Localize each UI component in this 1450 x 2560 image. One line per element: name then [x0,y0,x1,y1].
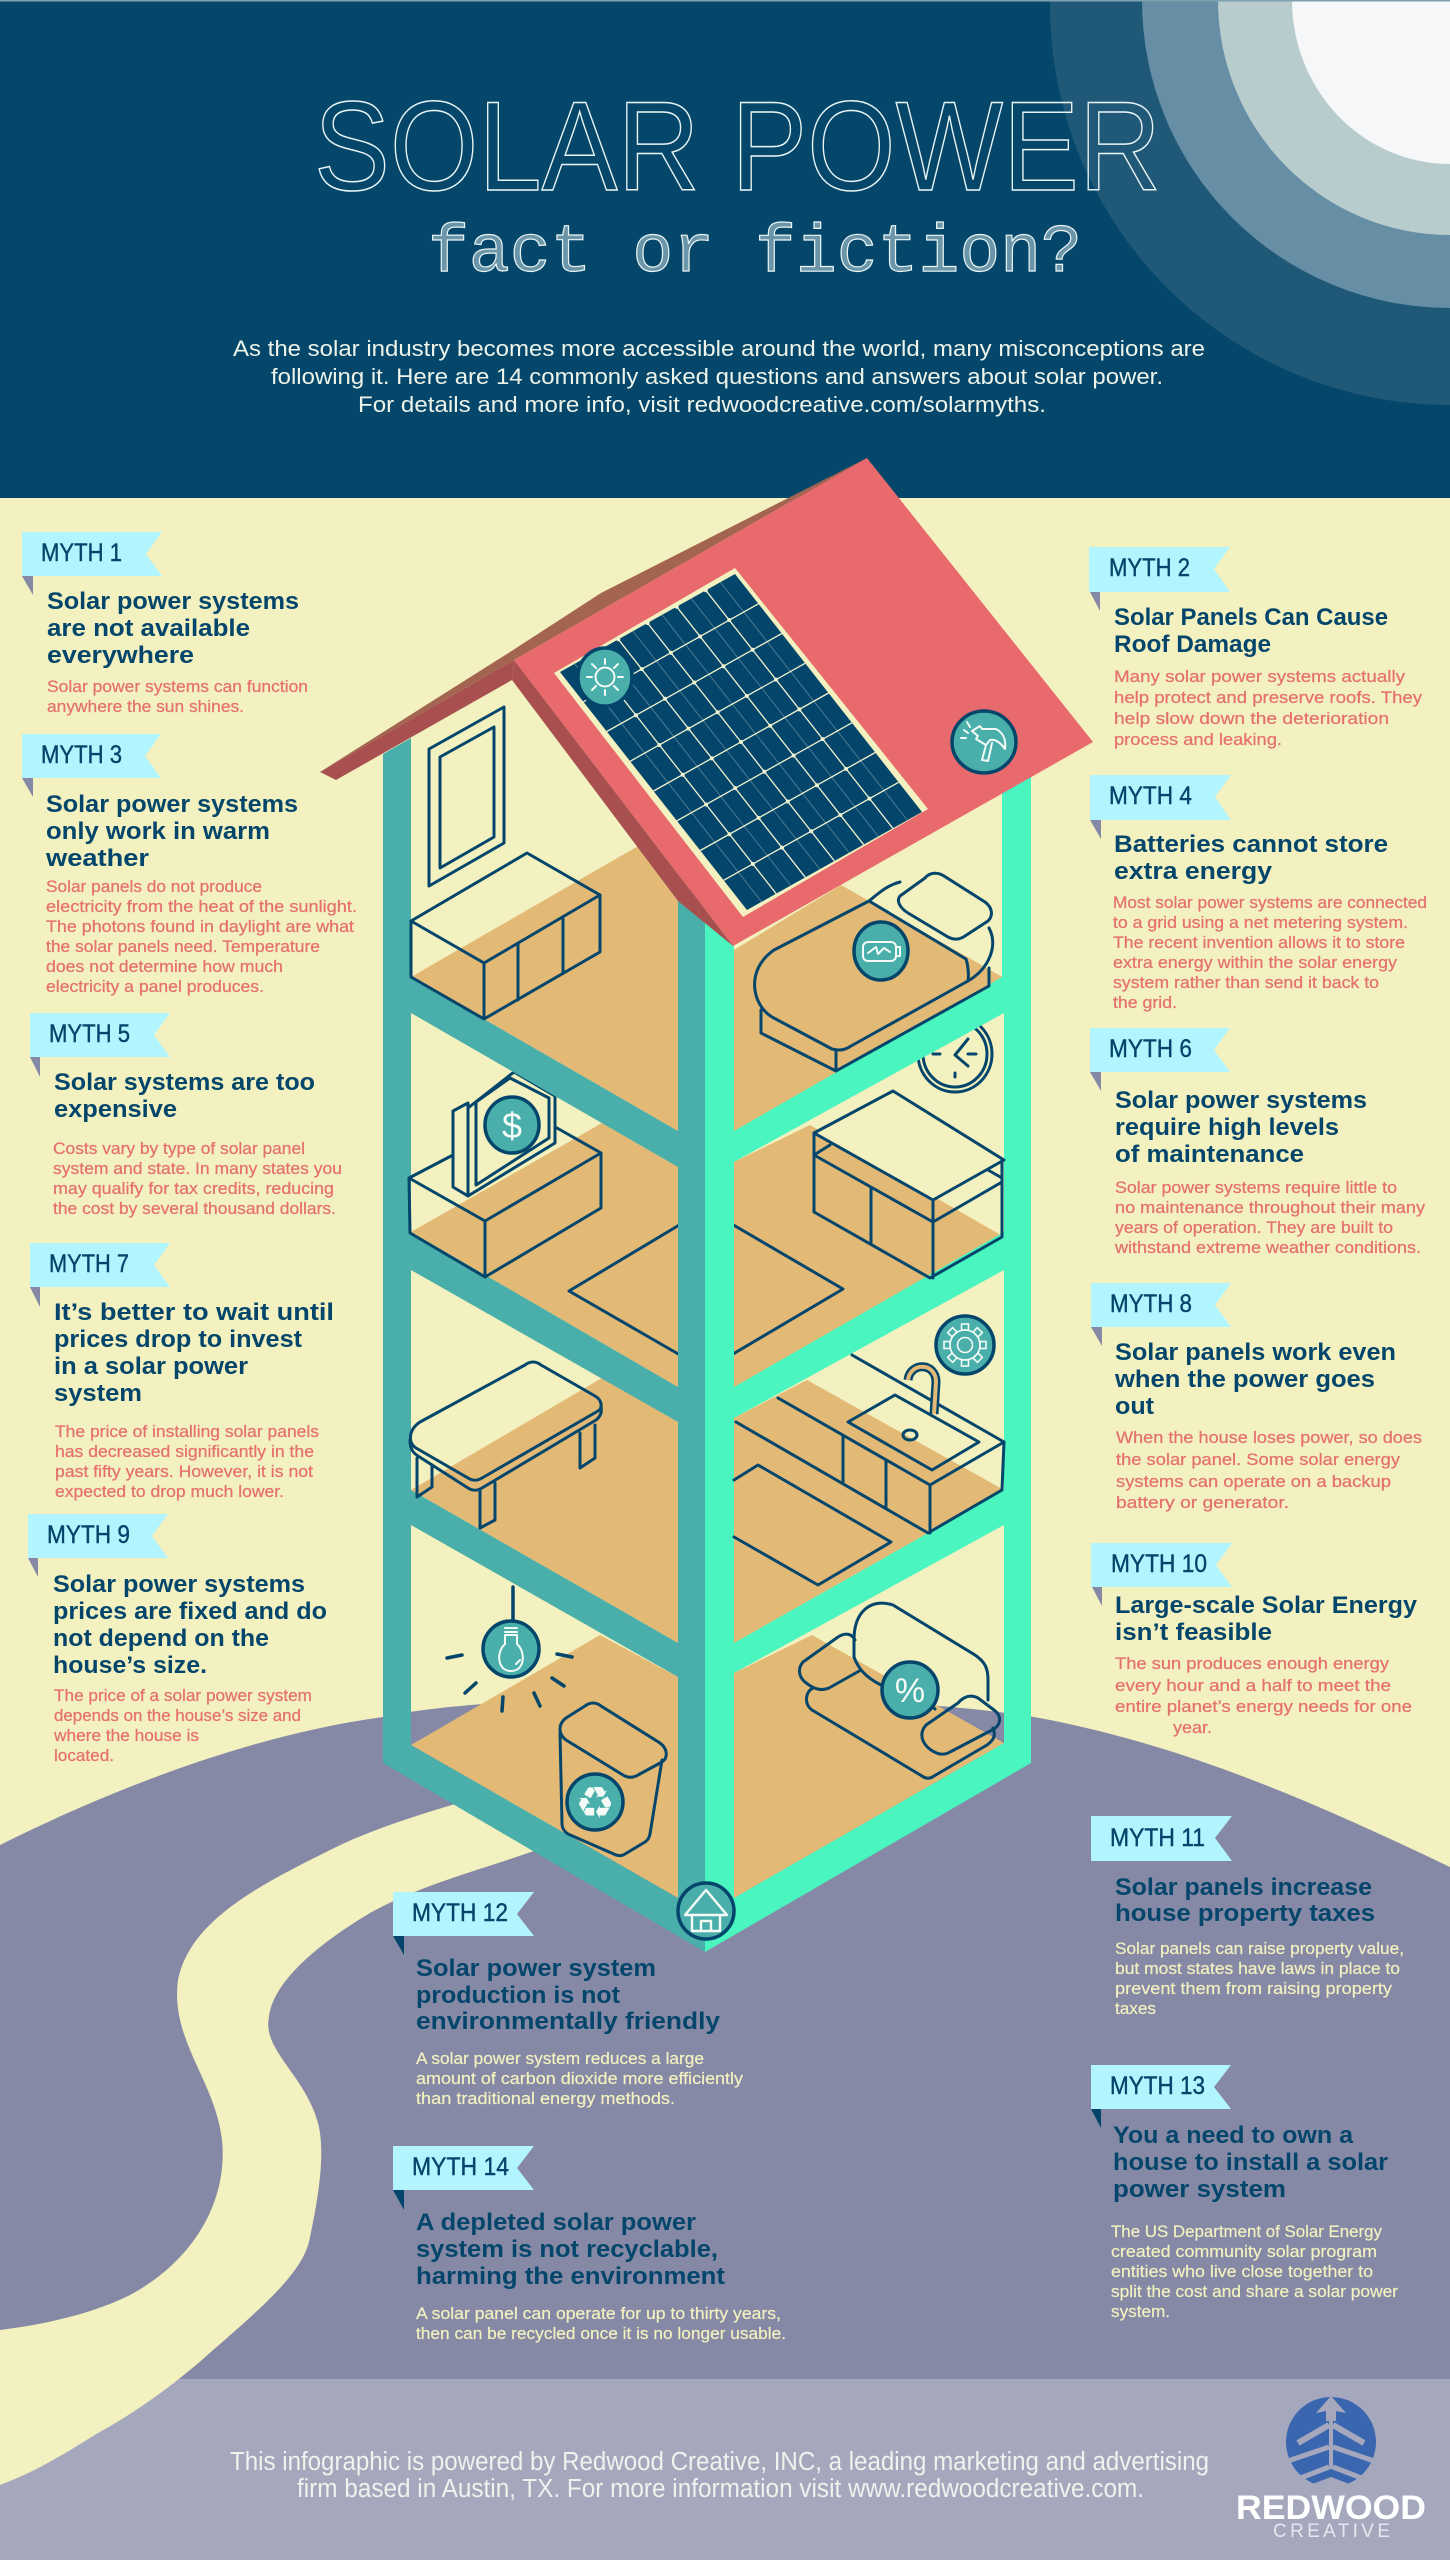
left frame wall [383,738,705,1952]
text: myth 9 [53,1686,312,1765]
text: myth 5: the cost by several thousand dollars. [53,1199,336,1218]
text: myth 7: expected to drop much lower. [55,1482,284,1501]
text: myth 7: past fifty years. However, it is not [55,1462,313,1481]
text: myth 10: year. [1173,1718,1212,1737]
text: myth 3: The photons found in daylight are what [46,917,354,936]
bulb cord and rays [447,1587,572,1711]
text: myth 8: the solar panel. Some solar energy [1116,1450,1401,1469]
text: myth 10: The sun produces enough energy [1115,1654,1390,1673]
window [429,707,504,886]
heading: myth 2: Solar Panels Can Cause [1114,604,1388,631]
heading: myth 7 [54,1299,334,1407]
panel: myth 9 [28,1514,327,1765]
heading: myth 13: You a need to own a [1113,2122,1354,2149]
intro text: following it. Here are 14 commonly asked questions and answers about solar power. [271,364,1163,389]
icon: dollar [485,1097,539,1153]
text: myth 4: The recent invention allows it to store [1113,933,1405,952]
panel: myth 10 [1091,1543,1418,1737]
text: myth 11: Solar panels can raise property value, [1115,1939,1404,1958]
text: myth 2 [1114,667,1423,749]
banner: myth 7: MYTH 7 [49,1250,129,1278]
text: myth 6: Solar power systems require little to [1115,1178,1397,1197]
heading: myth 12: environmentally friendly [416,2008,721,2035]
banner: myth 9 [28,1514,168,1577]
panel: myth 11 [1091,1816,1404,2018]
heading: myth 3: weather [45,845,149,872]
icon: home [678,1883,734,1939]
text: myth 13: The US Department of Solar Energy [1111,2222,1382,2241]
icon: gear [936,1316,994,1374]
text: myth 12: than traditional energy methods. [416,2089,675,2108]
banner: myth 2 [1089,547,1230,611]
heading: myth 3 [45,791,298,872]
heading: myth 14 [416,2209,725,2290]
heading: myth 14: A depleted solar power [416,2209,696,2236]
text: myth 9: where the house is [53,1726,199,1745]
text: myth 3: electricity from the heat of the sunlight. [46,897,357,916]
banner: myth 1: MYTH 1 [41,539,122,567]
kitchen counter and sink [736,1355,1004,1533]
text: myth 6: years of operation. They are built to [1115,1218,1393,1237]
icon: recycle: ♻ [575,1778,615,1829]
banner: myth 10 [1091,1543,1232,1606]
footer text [230,2448,1209,2503]
sun with rings [1050,0,1450,405]
text: myth 12: amount of carbon dioxide more efficiently [416,2069,744,2088]
text: myth 1 [47,677,308,716]
text: myth 6 [1114,1178,1426,1257]
heading: myth 5: Solar systems are too [54,1069,315,1096]
heading: myth 12 [416,1955,721,2035]
icon: percent: % [895,1672,925,1710]
heading: myth 12: Solar power system [416,1955,656,1982]
banner: myth 6 [1090,1028,1230,1091]
banner: myth 4: MYTH 4 [1109,782,1192,810]
banner: myth 8: MYTH 8 [1110,1290,1192,1318]
heading: myth 9 [53,1571,327,1679]
icon: percent [882,1662,938,1718]
text: myth 5: Costs vary by type of solar panel [53,1139,305,1158]
cabinet [411,853,600,1019]
text: myth 8 [1116,1428,1422,1512]
floors [411,845,1004,1898]
clock [918,1016,992,1092]
heading: myth 1: everywhere [47,642,194,669]
logo: Redwood Creative [1236,2396,1426,2542]
intro text [233,336,1205,417]
text: myth 4: Most solar power systems are connected [1113,893,1427,912]
icon: recycle [567,1774,623,1830]
text: myth 11 [1115,1939,1404,2018]
text: myth 3 [46,877,357,996]
banner: myth 5: MYTH 5 [49,1020,130,1048]
heading: myth 4: Batteries cannot store [1114,831,1388,858]
text: myth 13: entities who live close together to [1111,2262,1373,2281]
text: myth 9: located. [54,1746,114,1765]
logo mark [1286,2396,1376,2488]
heading: myth 3: only work in warm [46,818,270,845]
heading: myth 11: Solar panels increase [1115,1874,1372,1901]
heading: myth 6: require high levels [1115,1114,1339,1141]
banner: myth 11 [1091,1816,1232,1861]
panel: myth 5 [30,1013,342,1218]
banner: myth 14: MYTH 14 [412,2153,509,2181]
heading: myth 3: Solar power systems [46,791,298,818]
text: myth 7 [55,1422,319,1501]
icon: dollar: $ [502,1105,522,1146]
heading: myth 7: system [54,1380,142,1407]
footer band [0,2379,1450,2560]
banner: myth 14 [393,2146,534,2210]
panel: myth 3 [22,734,357,996]
solar panel [554,568,928,917]
banner: myth 3: MYTH 3 [41,741,122,769]
text: myth 13 [1111,2222,1398,2321]
heading: myth 4 [1114,831,1388,885]
trash can [560,1703,666,1856]
picture frames [453,1072,555,1196]
text: myth 10: entire planet’s energy needs for one [1115,1697,1412,1716]
banner: myth 12 [393,1892,534,1955]
banner: myth 5 [30,1013,170,1077]
banner: myth 8 [1091,1283,1231,1346]
text: myth 5: system and state. In many states you [53,1159,342,1178]
house illustration [320,458,1093,1952]
text: myth 13: created community solar program [1111,2242,1377,2261]
heading: myth 9: house’s size. [53,1652,207,1679]
text: myth 3: the solar panels need. Temperature [46,937,320,956]
rug [569,1209,843,1370]
side cabinet [814,1091,1004,1278]
heading: myth 12: production is not [416,1982,620,2009]
text: myth 4: to a grid using a net metering system. [1113,913,1408,932]
text: myth 2: process and leaking. [1114,730,1282,749]
bed [755,873,993,1071]
heading: myth 7: It’s better to wait until [54,1299,334,1326]
heading: myth 6: Solar power systems [1115,1087,1367,1114]
heading: myth 4: extra energy [1114,858,1273,885]
heading: myth 1 [47,588,299,669]
text: myth 9: The price of a solar power system [54,1686,312,1705]
text: myth 12 [416,2049,744,2108]
heading: myth 8: Solar panels work even [1115,1339,1396,1366]
text: myth 5: may qualify for tax credits, reducing [53,1179,334,1198]
text: myth 14 [416,2304,786,2343]
heading: myth 8: out [1115,1393,1154,1420]
text: myth 3: Solar panels do not produce [46,877,262,896]
text: myth 8: systems can operate on a backup [1116,1472,1391,1491]
heading: myth 7: in a solar power [54,1353,248,1380]
text: myth 2: help slow down the deterioration [1114,709,1389,728]
heading: myth 10: Large-scale Solar Energy [1115,1592,1418,1619]
banner: myth 2: MYTH 2 [1109,554,1190,582]
text: myth 7: has decreased significantly in the [55,1442,314,1461]
banner: myth 13: MYTH 13 [1110,2072,1205,2100]
icon: hammer [952,711,1016,773]
banner: myth 3 [22,734,161,797]
banner: myth 1 [22,532,162,595]
logo wordmark: REDWOOD [1236,2489,1426,2527]
text: myth 13: split the cost and share a solar power [1111,2282,1398,2301]
heading: myth 1: are not available [47,615,250,642]
title: SOLAR POWER [314,75,1161,217]
text: myth 4 [1113,893,1427,1012]
banner: myth 10: MYTH 10 [1111,1550,1207,1578]
panel: myth 8 [1091,1283,1422,1512]
panel: header [0,0,1450,498]
table [410,1362,601,1528]
ground hill [0,1697,1450,2381]
intro text: As the solar industry becomes more accessible around the world, many misconceptions are [233,336,1205,361]
text: myth 8: When the house loses power, so does [1116,1428,1422,1447]
heading: myth 5 [54,1069,315,1123]
text: myth 1: Solar power systems can function [47,677,308,696]
text: myth 5 [53,1139,342,1218]
text: myth 7: The price of installing solar panels [55,1422,319,1441]
heading: myth 10 [1115,1592,1418,1646]
text: myth 1: anywhere the sun shines. [47,697,244,716]
heading: myth 8 [1114,1339,1396,1420]
heading: myth 1: Solar power systems [47,588,299,615]
panel: myth 1 [22,532,308,716]
banner: myth 9: MYTH 9 [47,1521,130,1549]
heading: myth 6 [1115,1087,1367,1168]
intro text: For details and more info, visit redwoodcreative.com/solarmyths. [358,392,1046,417]
right frame wall [705,770,1031,1952]
icon: light bulb [483,1621,539,1677]
banner: myth 11: MYTH 11 [1110,1824,1205,1852]
icon: battery [854,922,908,980]
banner: myth 6: MYTH 6 [1109,1035,1192,1063]
text: myth 8: battery or generator. [1116,1493,1289,1512]
heading: myth 2: Roof Damage [1114,631,1271,658]
text: myth 14: A solar panel can operate for up to thirty years, [416,2304,781,2323]
subtitle: fact or fiction? [428,215,1082,292]
dresser [409,1128,601,1277]
footer text: firm based in Austin, TX. For more information visit www.redwoodcreative.com. [297,2475,1144,2503]
text: myth 12: A solar power system reduces a large [416,2049,704,2068]
heading: myth 14: harming the environment [416,2263,725,2290]
heading: myth 11 [1115,1874,1375,1927]
text: myth 4: the grid. [1113,993,1177,1012]
heading: myth 13 [1113,2122,1388,2203]
text: myth 2: Many solar power systems actually [1114,667,1406,686]
heading: myth 2 [1114,604,1388,658]
panel: myth 13 [1091,2065,1398,2321]
text: myth 10: every hour and a half to meet the [1115,1676,1391,1695]
floor rug [734,1465,891,1585]
text: myth 4: system rather than send it back to [1113,973,1379,992]
panel: myth 7 [30,1243,334,1501]
icon: sun [578,648,632,706]
banner: myth 13 [1091,2065,1231,2128]
text: myth 3: electricity a panel produces. [46,977,264,996]
sofa [799,1603,1000,1778]
banner: myth 4 [1090,775,1231,839]
heading: myth 9: Solar power systems [53,1571,305,1598]
banner: myth 12: MYTH 12 [412,1899,508,1927]
heading: myth 7: prices drop to invest [54,1326,302,1353]
text: myth 11: but most states have laws in place to [1115,1959,1400,1978]
heading: myth 9: not depend on the [53,1625,269,1652]
text: myth 10 [1115,1654,1412,1737]
heading: myth 10: isn’t feasible [1115,1619,1272,1646]
heading: myth 9: prices are fixed and do [53,1598,327,1625]
panel: myth 2 [1089,547,1423,749]
heading: myth 13: power system [1113,2176,1286,2203]
panel: myth 14 [393,2146,786,2343]
heading: myth 6: of maintenance [1115,1141,1304,1168]
panel: myth 4 [1090,775,1427,1012]
text: myth 14: then can be recycled once it is no longer usable. [416,2324,786,2343]
text: myth 3: does not determine how much [46,957,283,976]
text: myth 13: system. [1111,2302,1170,2321]
text: myth 9: depends on the house’s size and [54,1706,301,1725]
text: myth 11: prevent them from raising property [1115,1979,1393,1998]
heading: myth 14: system is not recyclable, [416,2236,718,2263]
winding road [0,1770,600,2485]
text: myth 2: help protect and preserve roofs. They [1114,688,1423,707]
panel: myth 6 [1090,1028,1426,1257]
roof [320,458,1093,946]
text: myth 11: taxes [1115,1999,1156,2018]
logo tagline: CREATIVE [1273,2521,1390,2542]
panel: myth 12 [393,1892,744,2108]
text: myth 6: withstand extreme weather conditions. [1114,1238,1421,1257]
heading: myth 5: expensive [54,1096,177,1123]
heading: myth 13: house to install a solar [1113,2149,1388,2176]
text: myth 6: no maintenance throughout their many [1115,1198,1426,1217]
heading: myth 11: house property taxes [1115,1900,1375,1927]
heading: myth 8: when the power goes [1114,1366,1375,1393]
text: myth 4: extra energy within the solar energy [1113,953,1398,972]
footer text: This infographic is powered by Redwood Creative, INC, a leading marketing and advertising [230,2448,1209,2476]
banner: myth 7 [30,1243,170,1307]
